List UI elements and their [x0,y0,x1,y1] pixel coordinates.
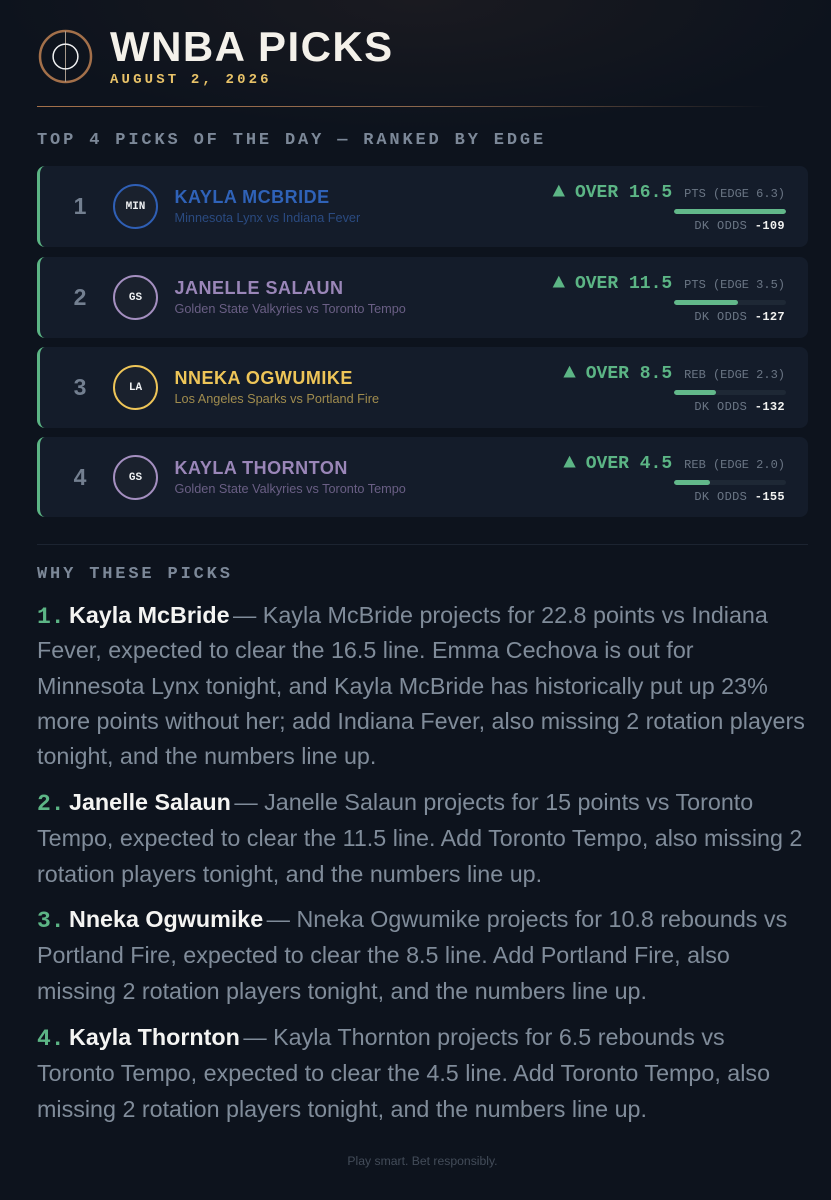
player name: JANELLE SALAUN [174,278,344,298]
odds: DK ODDS -155 [694,490,785,504]
pick line: OVER 11.5 PTS (EDGE 3.5) [575,274,785,294]
badge LA [113,365,158,410]
edge bar [674,480,786,485]
matchup: Minnesota Lynx vs Indiana Fever [174,211,360,225]
edge bar [674,390,786,395]
pick line: ▲ [552,272,565,295]
panel: pick 4 [37,437,808,517]
text block: reason 2: 2. [37,791,65,817]
player name: NNEKA OGWUMIKE [174,368,353,388]
text block: reason 1: 1. [37,604,65,630]
footer: Play smart. Bet responsibly. [347,1154,498,1168]
rank 3: 3 [74,374,86,400]
odds: DK ODDS -132 [694,400,785,414]
badge GS [113,455,158,500]
text block: reason 1: Minnesota Lynx tonight, and Kayla McBride has historically put up 23% [37,673,768,699]
pick line: OVER 4.5 REB (EDGE 2.0) [586,454,785,474]
badge MIN [113,184,158,229]
text block: reason 4 [37,1024,770,1122]
pick line: OVER 8.5 REB (EDGE 2.3) [586,364,785,384]
text block: reason 3: Nneka Ogwumike — Nneka Ogwumike projects for 10.8 rebounds vs [69,906,787,932]
badge GS: GS [129,292,142,304]
text block: reason 1: tonight, and the numbers line up. [37,743,376,769]
text block: reason 2 [37,789,802,887]
matchup: Los Angeles Sparks vs Portland Fire [174,392,379,406]
badge MIN: MIN [126,201,145,213]
text block: reason 2: Janelle Salaun — Janelle Salaun projects for 15 points vs Toronto [69,789,753,815]
text block: reason 3: missing 2 rotation players tonight, and the numbers line up. [37,978,647,1004]
panel: pick 1 [37,166,808,247]
text block: reason 2: rotation players tonight, and the numbers line up. [37,861,542,887]
rank 1: 1 [74,193,86,219]
text block: reason 1: Fever, expected to clear the 16.5 line. Emma Cechova is out for [37,637,694,663]
rank 2: 2 [74,284,86,310]
text block: reason 3: 3. [37,908,65,934]
text block: reason 2: Tempo, expected to clear the 11.5 line. Add Toronto Tempo, also missing 2 [37,825,802,851]
text block: reason 4: missing 2 rotation players tonight, and the numbers line up. [37,1096,647,1122]
text block: reason 1: Kayla McBride — Kayla McBride projects for 22.8 points vs Indiana [69,602,768,628]
text block: reason 4: 4. [37,1026,65,1052]
panel: pick 3 [37,347,808,428]
text block: reason 4: Kayla Thornton — Kayla Thornton projects for 6.5 rebounds vs [69,1024,725,1050]
text block: reason 1: more points without her; add Indiana Fever, also missing 2 rotation players [37,708,805,734]
player name: KAYLA THORNTON [174,458,348,478]
edge bar [674,209,786,214]
odds: DK ODDS -127 [694,310,785,324]
title: WNBA PICKS [110,23,394,70]
text block: reason 1 [37,602,805,769]
heading: top picks: TOP 4 PICKS OF THE DAY — RANKED BY EDGE [37,130,546,150]
text block: reason 4: Toronto Tempo, expected to clear the 4.5 line. Add Toronto Tempo, also [37,1060,770,1086]
matchup: Golden State Valkyries vs Toronto Tempo [174,482,406,496]
text block: reason 3 [37,906,787,1004]
heading: why these picks: WHY THESE PICKS [37,564,233,584]
player name: KAYLA MCBRIDE [174,187,330,207]
matchup: Golden State Valkyries vs Toronto Tempo [174,302,406,316]
date: AUGUST 2, 2026 [110,72,272,88]
header rule [37,106,808,107]
odds: DK ODDS -109 [694,219,785,233]
pick line: ▲ [563,452,576,475]
pick line: ▲ [552,181,565,204]
pick line: ▲ [563,362,576,385]
rank 4: 4 [74,464,86,490]
badge LA: LA [129,382,142,394]
badge GS [113,275,158,320]
pick line: OVER 16.5 PTS (EDGE 6.3) [575,183,785,203]
panel: pick 2 [37,257,808,338]
icon: court logo [38,30,92,84]
badge GS: GS [129,472,142,484]
text block: reason 3: Portland Fire, expected to clear the 8.5 line. Add Portland Fire, also [37,942,730,968]
edge bar [674,300,786,305]
